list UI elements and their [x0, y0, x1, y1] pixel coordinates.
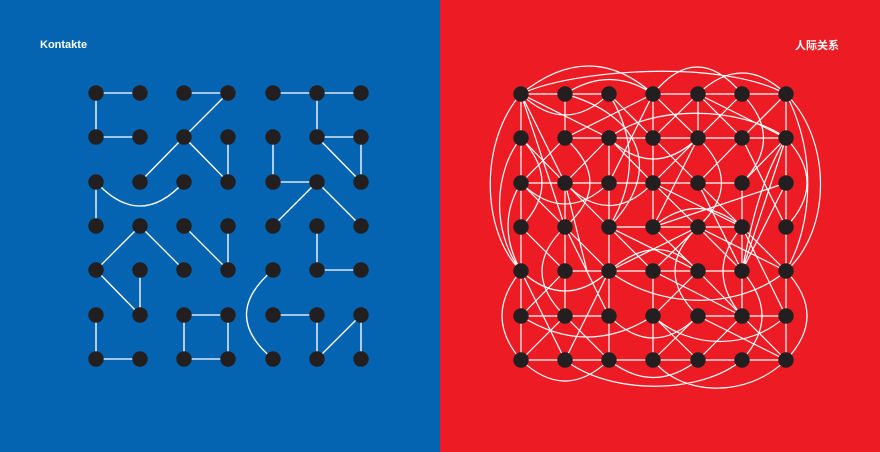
nodes: black dots — [513, 86, 794, 368]
network: dense connections — [490, 66, 820, 388]
grid segments — [521, 94, 786, 360]
network: sparse connections — [96, 93, 361, 359]
heading: Kontakte: Kontakte — [40, 39, 87, 51]
panel: blue Kontakte — [0, 0, 440, 452]
nodes: black dots — [88, 85, 369, 367]
panel: red 人际关系 — [440, 0, 880, 452]
curved links — [490, 66, 820, 388]
straight diagonals — [521, 94, 786, 360]
heading: 人际关系: 人际关系 — [795, 38, 839, 52]
